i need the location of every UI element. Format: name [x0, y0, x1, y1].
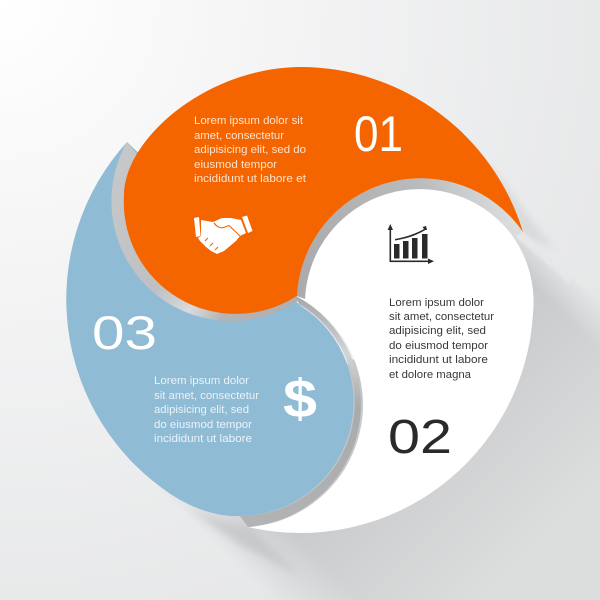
text block 02: et dolore magna	[389, 369, 472, 381]
number 02: 02	[388, 411, 452, 464]
orange segment lip	[111, 142, 298, 321]
icon: handshake	[194, 216, 252, 254]
icon: growth chart	[388, 224, 434, 264]
text block 02: Lorem ipsum dolor	[389, 297, 484, 309]
text block 01: eiusmod tempor	[194, 159, 277, 171]
text block 03: incididunt ut labore	[154, 433, 252, 445]
text block 01: incididunt ut labore et	[194, 173, 306, 185]
long shadow	[190, 182, 600, 600]
blue segment lip	[240, 296, 361, 527]
text block 02: adipisicing elit, sed	[389, 325, 486, 337]
segment 02: white	[248, 188, 534, 533]
text block 03: Lorem ipsum dolor	[154, 375, 249, 387]
text block 03: do eiusmod tempor	[154, 419, 252, 431]
text block 01: Lorem ipsum dolor sit	[194, 115, 303, 127]
icon: dollar sign: $	[283, 369, 317, 429]
text block 01: amet, consectetur	[194, 130, 284, 142]
text block 02: do eiusmod tempor	[389, 340, 488, 352]
text block 03: sit amet, consectetur	[154, 390, 259, 402]
text block 03	[154, 375, 259, 445]
white segment lip	[297, 178, 523, 299]
segment 03: blue	[66, 142, 354, 516]
number 03: 03	[92, 306, 157, 359]
number 01: 01	[354, 106, 403, 162]
text block 01: adipisicing elit, sed do	[194, 144, 306, 156]
text block 01	[194, 115, 306, 185]
text block 02	[389, 297, 494, 381]
segment 01: orange	[124, 67, 523, 314]
text block 02: sit amet, consectetur	[389, 311, 494, 323]
text block 03: adipisicing elit, sed	[154, 404, 249, 416]
text block 02: incididunt ut labore	[389, 354, 488, 366]
